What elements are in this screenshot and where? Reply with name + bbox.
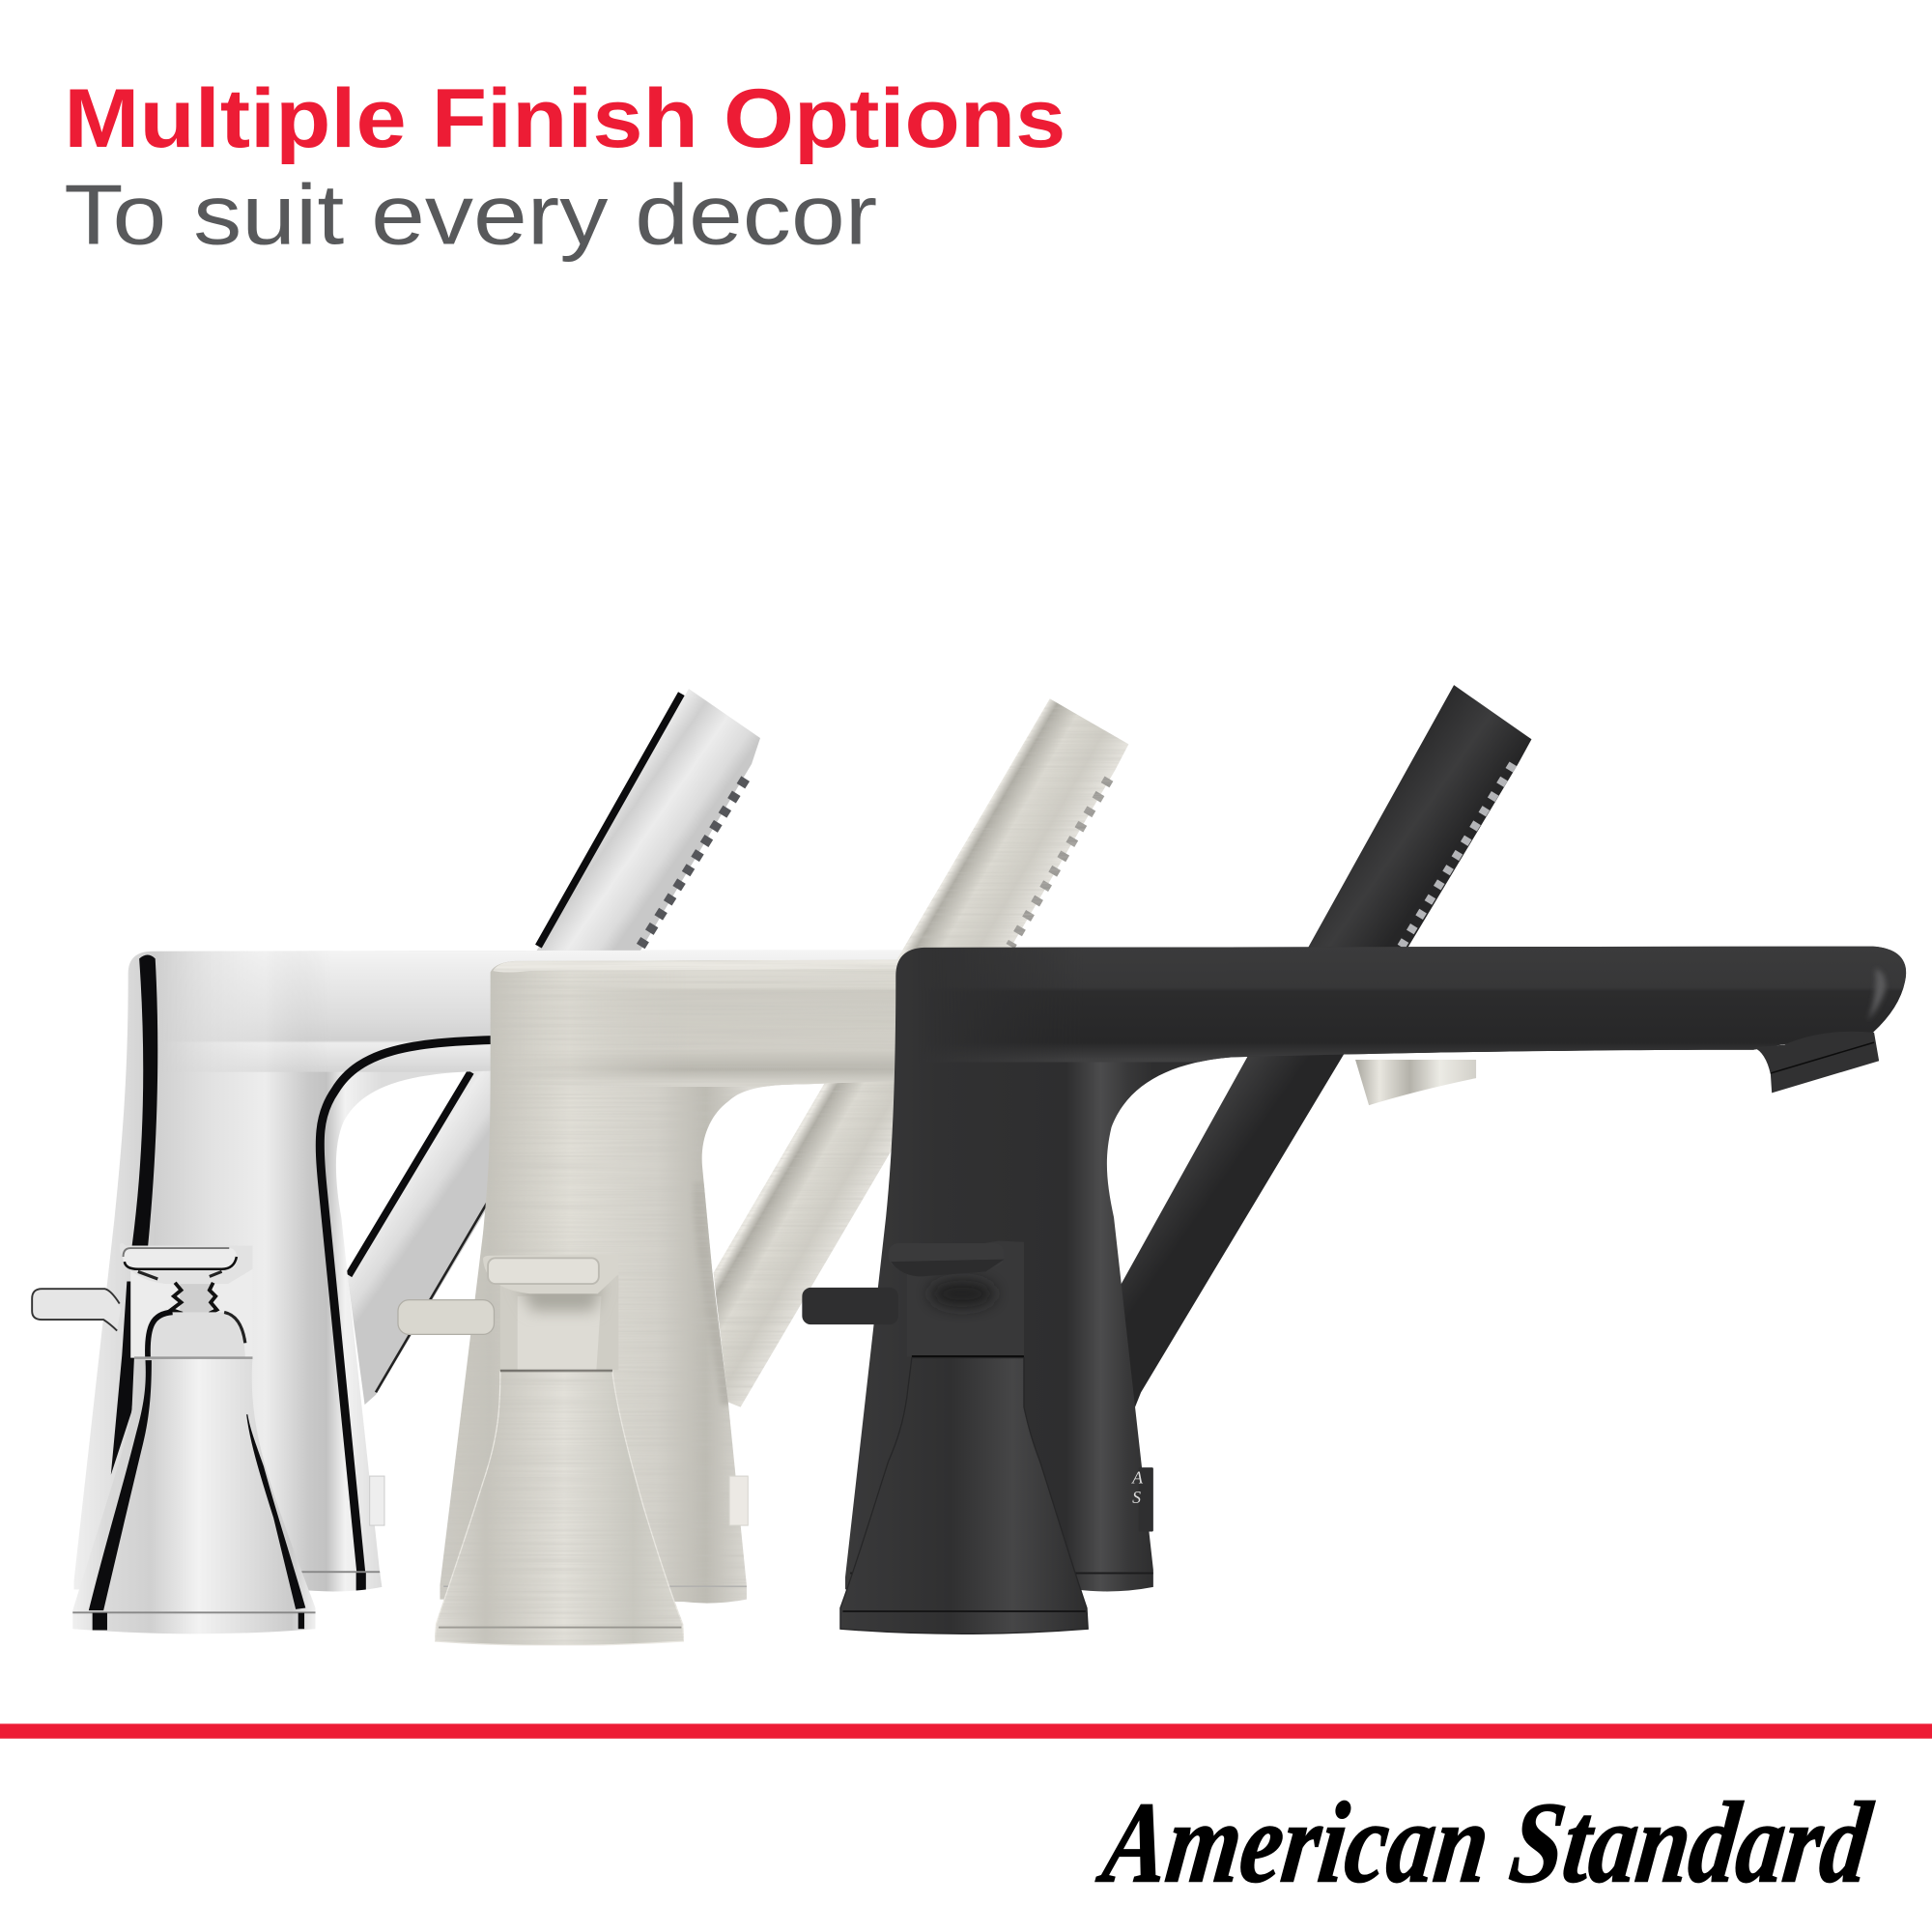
divider: red rule: [0, 1723, 1932, 1739]
nickel spout tip: [1355, 1060, 1476, 1105]
black lever: [802, 1288, 898, 1324]
black valve button: [1139, 1467, 1153, 1531]
black aerator: [1753, 1032, 1879, 1093]
black hand shower: [1109, 685, 1531, 1417]
black faucet: [802, 685, 1932, 1634]
chrome valve button: [370, 1476, 384, 1525]
nickel valve button: [729, 1476, 748, 1525]
black body and spout: [838, 936, 1932, 1602]
chrome spout shading: [228, 951, 902, 1072]
chrome cone base: [72, 1358, 316, 1634]
title: Multiple Finish Options: [64, 71, 1065, 165]
black cone base: [840, 1358, 1088, 1634]
chrome lever: [32, 1289, 121, 1331]
black brand mark: A: [1131, 1468, 1143, 1488]
nickel hand shower: [714, 698, 1128, 1407]
nickel lever: [398, 1300, 494, 1334]
black handle: [889, 1240, 1024, 1358]
chrome body and spout: [62, 943, 949, 1602]
black brand mark: [1131, 1468, 1143, 1507]
nickel body and spout: [431, 955, 930, 1608]
chrome hand shower: [348, 689, 760, 1405]
chrome handle: [120, 1243, 252, 1358]
black brand mark: S: [1132, 1488, 1141, 1507]
subtitle: To suit every decor: [64, 167, 877, 263]
nickel handle: [483, 1254, 618, 1370]
nickel faucet: [398, 698, 1476, 1645]
nickel cone base: [435, 1370, 684, 1645]
chrome faucet: [32, 689, 949, 1634]
chrome body stripes: [131, 955, 157, 1247]
